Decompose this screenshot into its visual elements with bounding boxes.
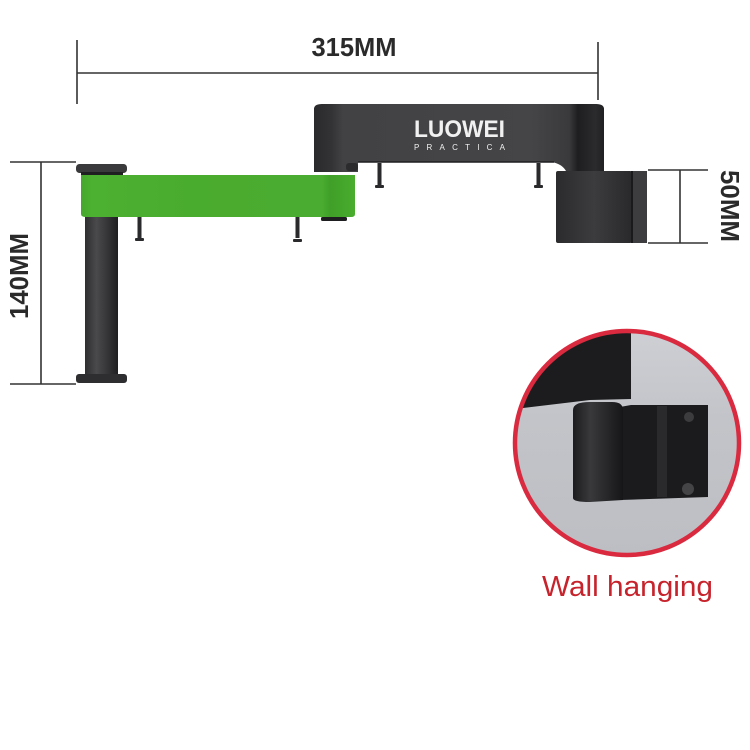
mount plate <box>620 405 708 500</box>
product: monitor arm <box>76 104 647 383</box>
dimension: 315MM width: 315MM <box>312 32 396 62</box>
dark panel corner <box>523 333 631 408</box>
screw pins <box>135 163 543 242</box>
callout: wall hanging circular photo <box>510 325 745 560</box>
dimension: 140MM height: 140MM <box>4 233 34 319</box>
wall bracket block <box>556 171 647 243</box>
black upper arm <box>314 104 604 172</box>
dimension: 315MM width <box>77 32 598 104</box>
mount screws <box>684 412 694 422</box>
caption: wall hanging: Wall hanging <box>542 571 713 603</box>
green lower arm <box>81 175 355 221</box>
arm post with end caps <box>76 164 127 383</box>
mount cylinder <box>573 402 623 502</box>
dimension: 50MM height <box>648 170 745 243</box>
dimension: 140MM height <box>4 162 76 384</box>
LUOWEI logo: PRACTICA <box>414 143 506 152</box>
LUOWEI logo: LUOWEI <box>414 116 505 143</box>
dimension: 50MM height: 50MM <box>715 170 745 242</box>
